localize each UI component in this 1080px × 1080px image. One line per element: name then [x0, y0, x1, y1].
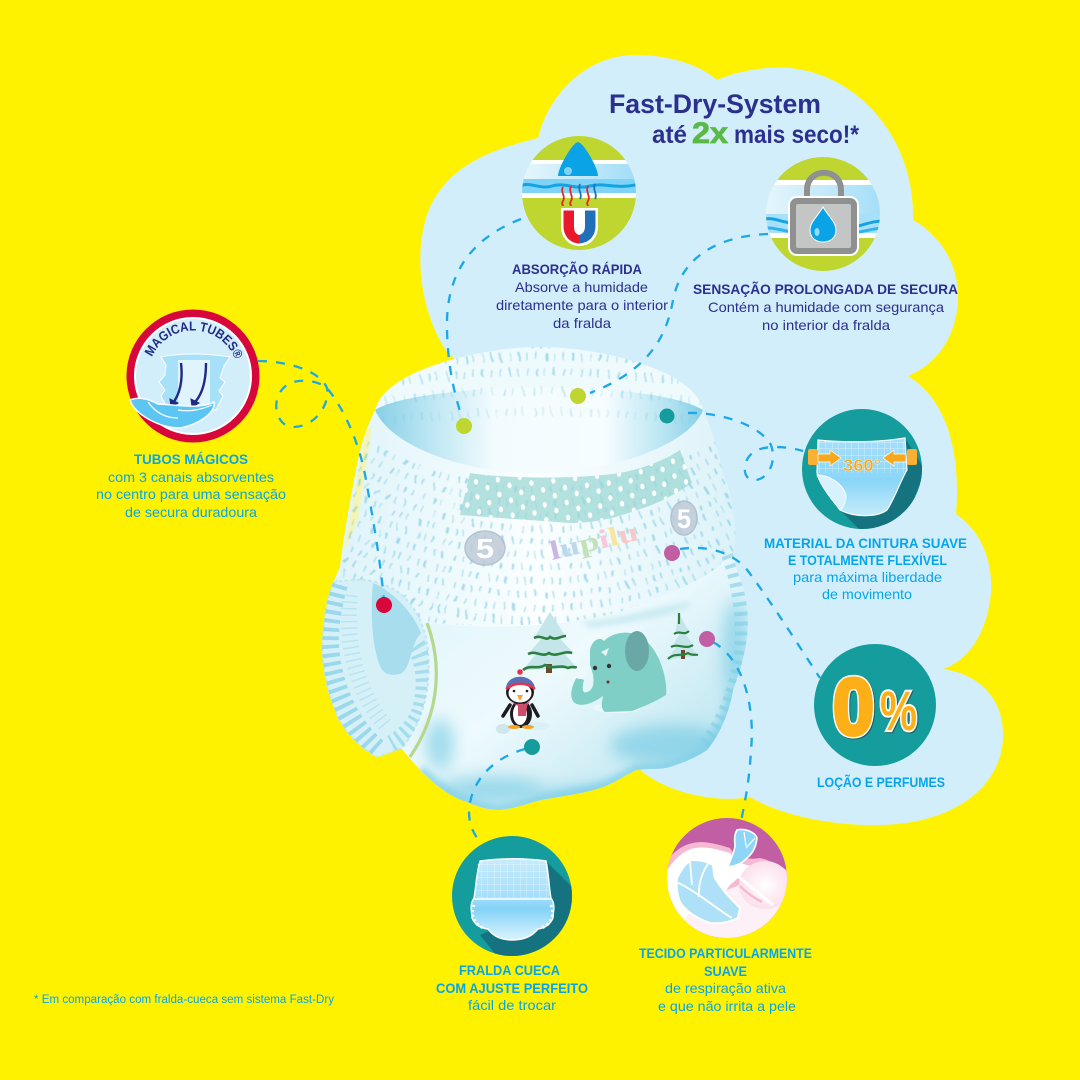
elephant — [571, 631, 666, 713]
heading: sensação prolongada — [693, 280, 958, 333]
heading: sensação prolongada: no interior da fralda — [762, 317, 890, 333]
leg opening — [322, 580, 436, 757]
title: Fast-Dry-System — [609, 89, 859, 150]
text: material da cintura: para máxima liberdade — [793, 569, 942, 585]
text: tubos mágicos — [96, 451, 286, 520]
text: fralda cueca: FRALDA CUECA — [459, 962, 560, 978]
text: tubos mágicos: TUBOS MÁGICOS — [134, 451, 248, 467]
text: tubos mágicos: no centro para uma sensação — [96, 486, 286, 502]
icon: 360 waist — [802, 409, 925, 535]
heading: absorção rápida: diretamente para o interior — [496, 297, 668, 313]
connector: teal to pull-up fit — [469, 749, 525, 843]
elastic shirring — [336, 441, 736, 626]
text: loção e perfumes: LOÇÃO E PERFUMES — [817, 773, 945, 790]
icon: magical tubes: MAGICAL TUBES® — [144, 322, 242, 358]
heading: absorção rápida: da fralda — [553, 315, 611, 331]
diaper illustration — [320, 340, 760, 820]
panel: light blue cloud — [420, 55, 1003, 825]
green leg band — [410, 623, 436, 757]
icon: 360 waist: 360° — [843, 456, 881, 475]
text: material da cintura — [764, 535, 967, 602]
heading: absorção rápida — [496, 260, 668, 331]
penguin — [496, 669, 549, 734]
logo: lupilu: lupilu — [547, 516, 641, 566]
icon: pull-up fit — [452, 836, 580, 960]
icon: soft fabric leaves — [667, 818, 787, 938]
title: Fast-Dry-System: até — [652, 121, 687, 149]
logo: size 5 left — [465, 531, 505, 565]
lower scene panel — [420, 552, 760, 820]
text: fralda cueca — [436, 962, 588, 1013]
text: tecido particularmente: e que não irrita a pele — [658, 998, 796, 1014]
title: Fast-Dry-System: mais seco!* — [734, 121, 859, 149]
tree right — [668, 613, 698, 659]
connector: waist material — [688, 413, 803, 480]
heading: absorção rápida: Absorve a humidade — [515, 279, 648, 295]
side yellow strip — [344, 425, 372, 552]
connector: plum to soft fabric — [713, 642, 752, 822]
text: material da cintura: MATERIAL DA CINTURA SUAVE — [764, 535, 967, 551]
heading: sensação prolongada: Contém a humidade com segurança — [708, 299, 944, 315]
icon: zero percent: % — [880, 679, 917, 742]
connector: absorption — [447, 219, 521, 418]
title: Fast-Dry-System: Fast-Dry-System — [609, 89, 821, 119]
inner shirring — [375, 344, 703, 422]
logo: size 5 right — [671, 501, 697, 535]
logo: size 5 left: 5 — [476, 533, 494, 564]
text: tecido particularmente: SUAVE — [704, 963, 747, 979]
title: Fast-Dry-System: 2x — [692, 117, 728, 150]
snow drift — [582, 603, 692, 628]
icon: padlock with drop — [766, 157, 880, 271]
soft shading folds — [426, 600, 747, 804]
text: tecido particularmente — [639, 945, 812, 1014]
text: tecido particularmente: de respiração ativa — [665, 980, 786, 996]
connector: lock — [590, 234, 768, 393]
diaper body base — [332, 410, 748, 810]
icon: magical tubes — [126, 310, 260, 442]
markers on diaper — [376, 388, 715, 755]
text: fralda cueca: COM AJUSTE PERFEITO — [436, 980, 588, 996]
dotted teal band — [460, 450, 692, 523]
icon: rapid absorption magnet — [520, 136, 640, 250]
waist opening — [375, 387, 703, 473]
icon: zero percent: 0 — [833, 662, 874, 751]
icon: zero percent: 0 — [833, 662, 874, 751]
connector: magical tubes — [258, 361, 384, 600]
logo: size 5 right: 5 — [677, 504, 691, 534]
icon: zero percent: 0 — [834, 663, 875, 752]
text: tubos mágicos: com 3 canais absorventes — [108, 469, 274, 485]
heading: sensação prolongada: SENSAÇÃO PROLONGADA DE SECURA — [693, 280, 958, 297]
leg hole inner — [372, 583, 421, 675]
text: fralda cueca: fácil de trocar — [468, 997, 556, 1013]
tree left — [523, 612, 577, 673]
waist rim — [375, 347, 703, 473]
body edge shading — [420, 690, 733, 810]
right frill — [707, 553, 747, 750]
icon: zero percent — [814, 644, 936, 766]
icon: zero percent: % — [880, 679, 917, 742]
icon: zero percent: % — [881, 680, 918, 743]
text: material da cintura: E TOTALMENTE FLEXÍVEL — [788, 552, 947, 568]
text: tecido particularmente: TECIDO PARTICULARMENTE — [639, 945, 812, 961]
text: tubos mágicos: de secura duradoura — [125, 504, 257, 520]
text: material da cintura: de movimento — [822, 586, 912, 602]
footnote: * Em comparação com fralda-cueca sem sistema Fast-Dry — [34, 994, 334, 1006]
connector: zero percent — [680, 548, 820, 678]
heading: absorção rápida: ABSORÇÃO RÁPIDA — [512, 260, 642, 277]
